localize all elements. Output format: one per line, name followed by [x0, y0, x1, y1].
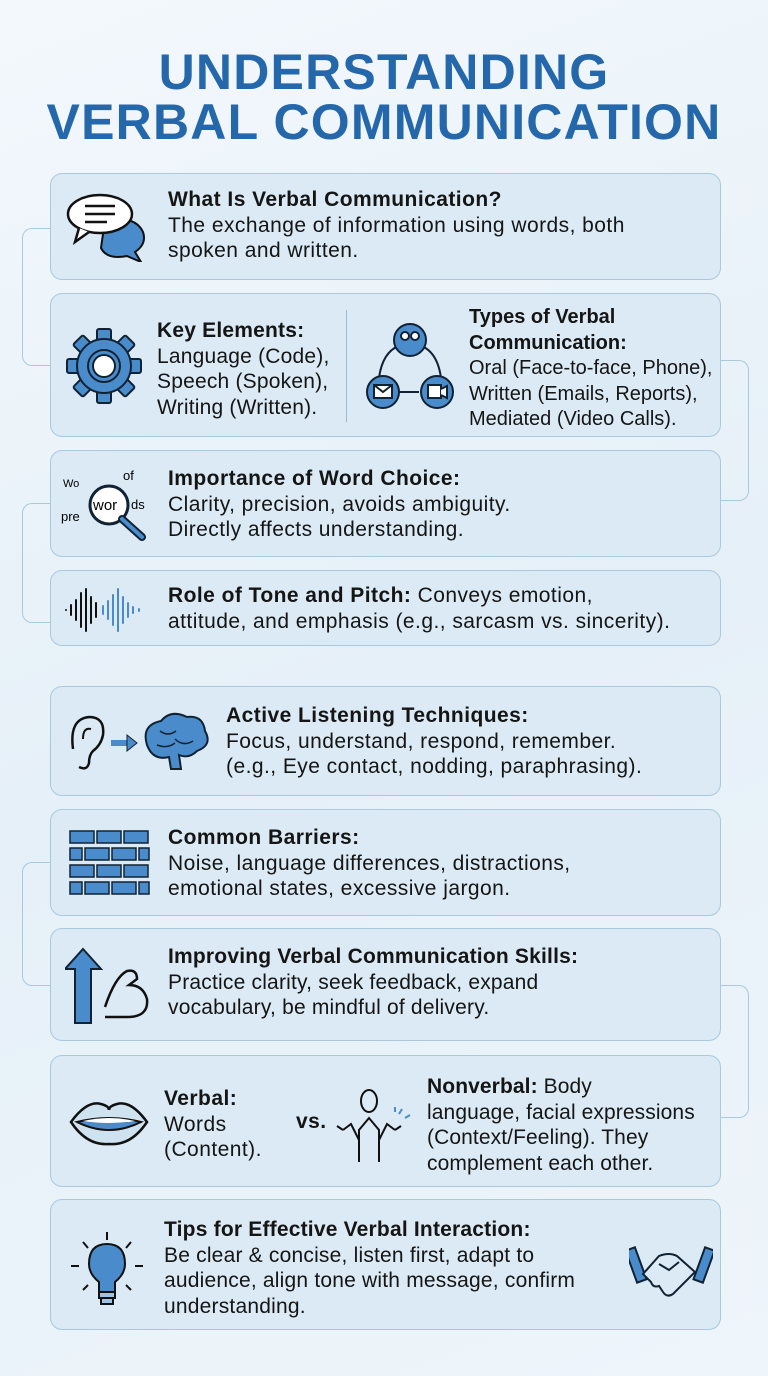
text: verbal: Verbal: [164, 1087, 237, 1110]
text: key elements [157, 319, 330, 418]
panel: tone [50, 570, 721, 646]
text: The exchange of information using words, both [168, 214, 625, 236]
text: spoken and written. [168, 239, 359, 262]
panel: word choice [50, 450, 721, 557]
text [226, 704, 642, 778]
icon: shrug person [336, 1089, 410, 1162]
icon: arrow and muscle [65, 948, 148, 1024]
panel: key elements & types [50, 293, 721, 437]
icon: speech bubbles [66, 194, 145, 262]
icon: magnifier words: wor [92, 497, 117, 514]
text: vocabulary, be mindful of delivery. [168, 996, 489, 1019]
text: Practice clarity, seek feedback, expand [168, 970, 538, 994]
icon: waveform [65, 588, 140, 632]
text: verbal: Words [164, 1112, 227, 1136]
title [46, 44, 721, 150]
text: (e.g., Eye contact, nodding, paraphrasing). [226, 755, 642, 778]
text: nonverbal: complement each other. [427, 1152, 653, 1174]
text [168, 826, 571, 900]
text: types: Oral (Face-to-face, Phone), [469, 357, 712, 379]
text: attitude, and emphasis (e.g., sarcasm vs. sincerity). [168, 610, 670, 632]
text: types: Types of Verbal [469, 306, 615, 328]
text [168, 584, 670, 632]
text: Improving Verbal Communication Skills: [168, 945, 578, 968]
text: verbal [164, 1087, 262, 1161]
text: vs: vs. [296, 1110, 327, 1133]
text: key elements: Speech (Spoken), [157, 370, 328, 393]
text: What Is Verbal Communication? [168, 188, 502, 211]
text: nonverbal: (Context/Feeling). They [427, 1126, 648, 1149]
connector lines [22, 201, 749, 1292]
text: types: Communication: [469, 332, 627, 354]
icon: communication types [366, 323, 454, 409]
text: Clarity, precision, avoids ambiguity. [168, 492, 511, 516]
text: nonverbal [427, 1075, 695, 1174]
text: nonverbal: language, facial expressions [427, 1100, 695, 1124]
text: Noise, language differences, distractions, [168, 852, 571, 874]
text [168, 945, 578, 1019]
text: types [469, 306, 712, 430]
panel: improving [50, 928, 721, 1041]
icon: ear to brain [71, 712, 209, 770]
text: emotional states, excessive jargon. [168, 877, 511, 900]
text: verbal: (Content). [164, 1138, 262, 1161]
icon: magnifier words [61, 468, 146, 541]
panel: active listening [50, 686, 721, 796]
icon: magnifier words: ds [131, 497, 145, 512]
text: types: Written (Emails, Reports), [469, 382, 698, 404]
text: Tips for Effective Verbal Interaction: [164, 1218, 531, 1241]
text: Active Listening Techniques: [226, 704, 529, 727]
text: key elements: Key Elements: [157, 319, 304, 342]
icon: gear [66, 328, 142, 404]
panel: verbal vs nonverbal [50, 1055, 721, 1187]
text: Be clear & concise, listen first, adapt to [164, 1244, 534, 1266]
icon: light bulb [71, 1232, 143, 1305]
text [168, 188, 625, 262]
icon: lips [70, 1102, 148, 1146]
text: types: Mediated (Video Calls). [469, 408, 677, 430]
icon: magnifier words: pre [61, 509, 80, 524]
icon: magnifier words: of [123, 468, 134, 483]
text [164, 1218, 575, 1318]
text: Common Barriers: [168, 826, 360, 849]
text: key elements: Language (Code), [157, 344, 330, 368]
text: audience, align tone with message, confirm [164, 1269, 575, 1292]
panel: barriers [50, 809, 721, 916]
text: key elements: Writing (Written). [157, 396, 317, 418]
text [168, 467, 511, 541]
title: UNDERSTANDING [159, 44, 609, 100]
icon: handshake [629, 1246, 713, 1297]
panel: what is [50, 173, 721, 280]
icon: magnifier words: Wo [63, 478, 79, 490]
text: Focus, understand, respond, remember. [226, 730, 616, 752]
text: nonverbal: Nonverbal: Body [427, 1075, 592, 1098]
title: VERBAL COMMUNICATION [47, 94, 721, 150]
text: Role of Tone and Pitch: Conveys emotion, [168, 584, 593, 607]
text: Importance of Word Choice: [168, 467, 460, 490]
panel: tips [50, 1199, 721, 1330]
text: Directly affects understanding. [168, 518, 464, 541]
text: understanding. [164, 1294, 306, 1318]
icon: brick wall [69, 830, 150, 895]
